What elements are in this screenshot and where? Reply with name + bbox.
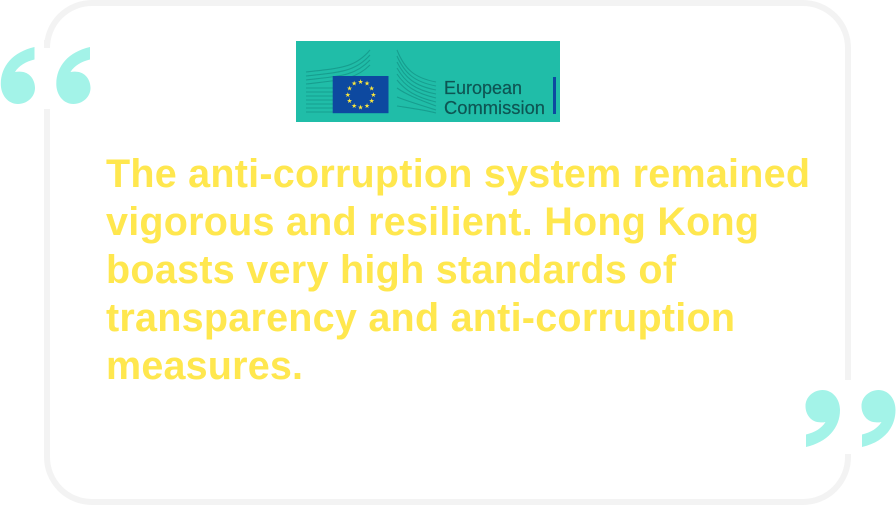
quote text [106, 152, 810, 388]
icon: opening quotation marks [1, 47, 90, 104]
logo: ring of stars: ★ [364, 102, 370, 110]
logo: ring of stars: ★ [358, 78, 364, 86]
logo: wordmark: European [444, 77, 522, 98]
logo: ring of stars: ★ [347, 97, 353, 105]
quote text: measures. [106, 344, 303, 388]
logo: European Commission [296, 41, 560, 122]
logo: ring of stars: ★ [358, 104, 364, 112]
quote text: transparency and anti-corruption [106, 296, 735, 340]
logo: wordmark [444, 77, 545, 118]
logo: blue divider [553, 77, 556, 114]
icon: closing quotation marks [806, 390, 896, 447]
logo: ring of stars: ★ [345, 91, 351, 99]
logo: ring of stars: ★ [364, 80, 370, 88]
quote text: The anti-corruption system remained [106, 152, 810, 196]
logo: ring of stars [345, 78, 376, 112]
quote text: boasts very high standards of [106, 248, 677, 292]
logo: right building lines [397, 50, 436, 113]
logo: ring of stars: ★ [347, 84, 353, 92]
logo: left building lines [306, 50, 370, 112]
logo: ring of stars: ★ [369, 97, 375, 105]
logo: EU flag [333, 76, 388, 113]
logo: wordmark: Commission [444, 97, 545, 118]
logo: ring of stars: ★ [351, 102, 357, 110]
logo: ring of stars: ★ [370, 91, 376, 99]
quote text: vigorous and resilient. Hong Kong [106, 200, 759, 244]
logo: ring of stars: ★ [369, 84, 375, 92]
logo: ring of stars: ★ [351, 80, 357, 88]
